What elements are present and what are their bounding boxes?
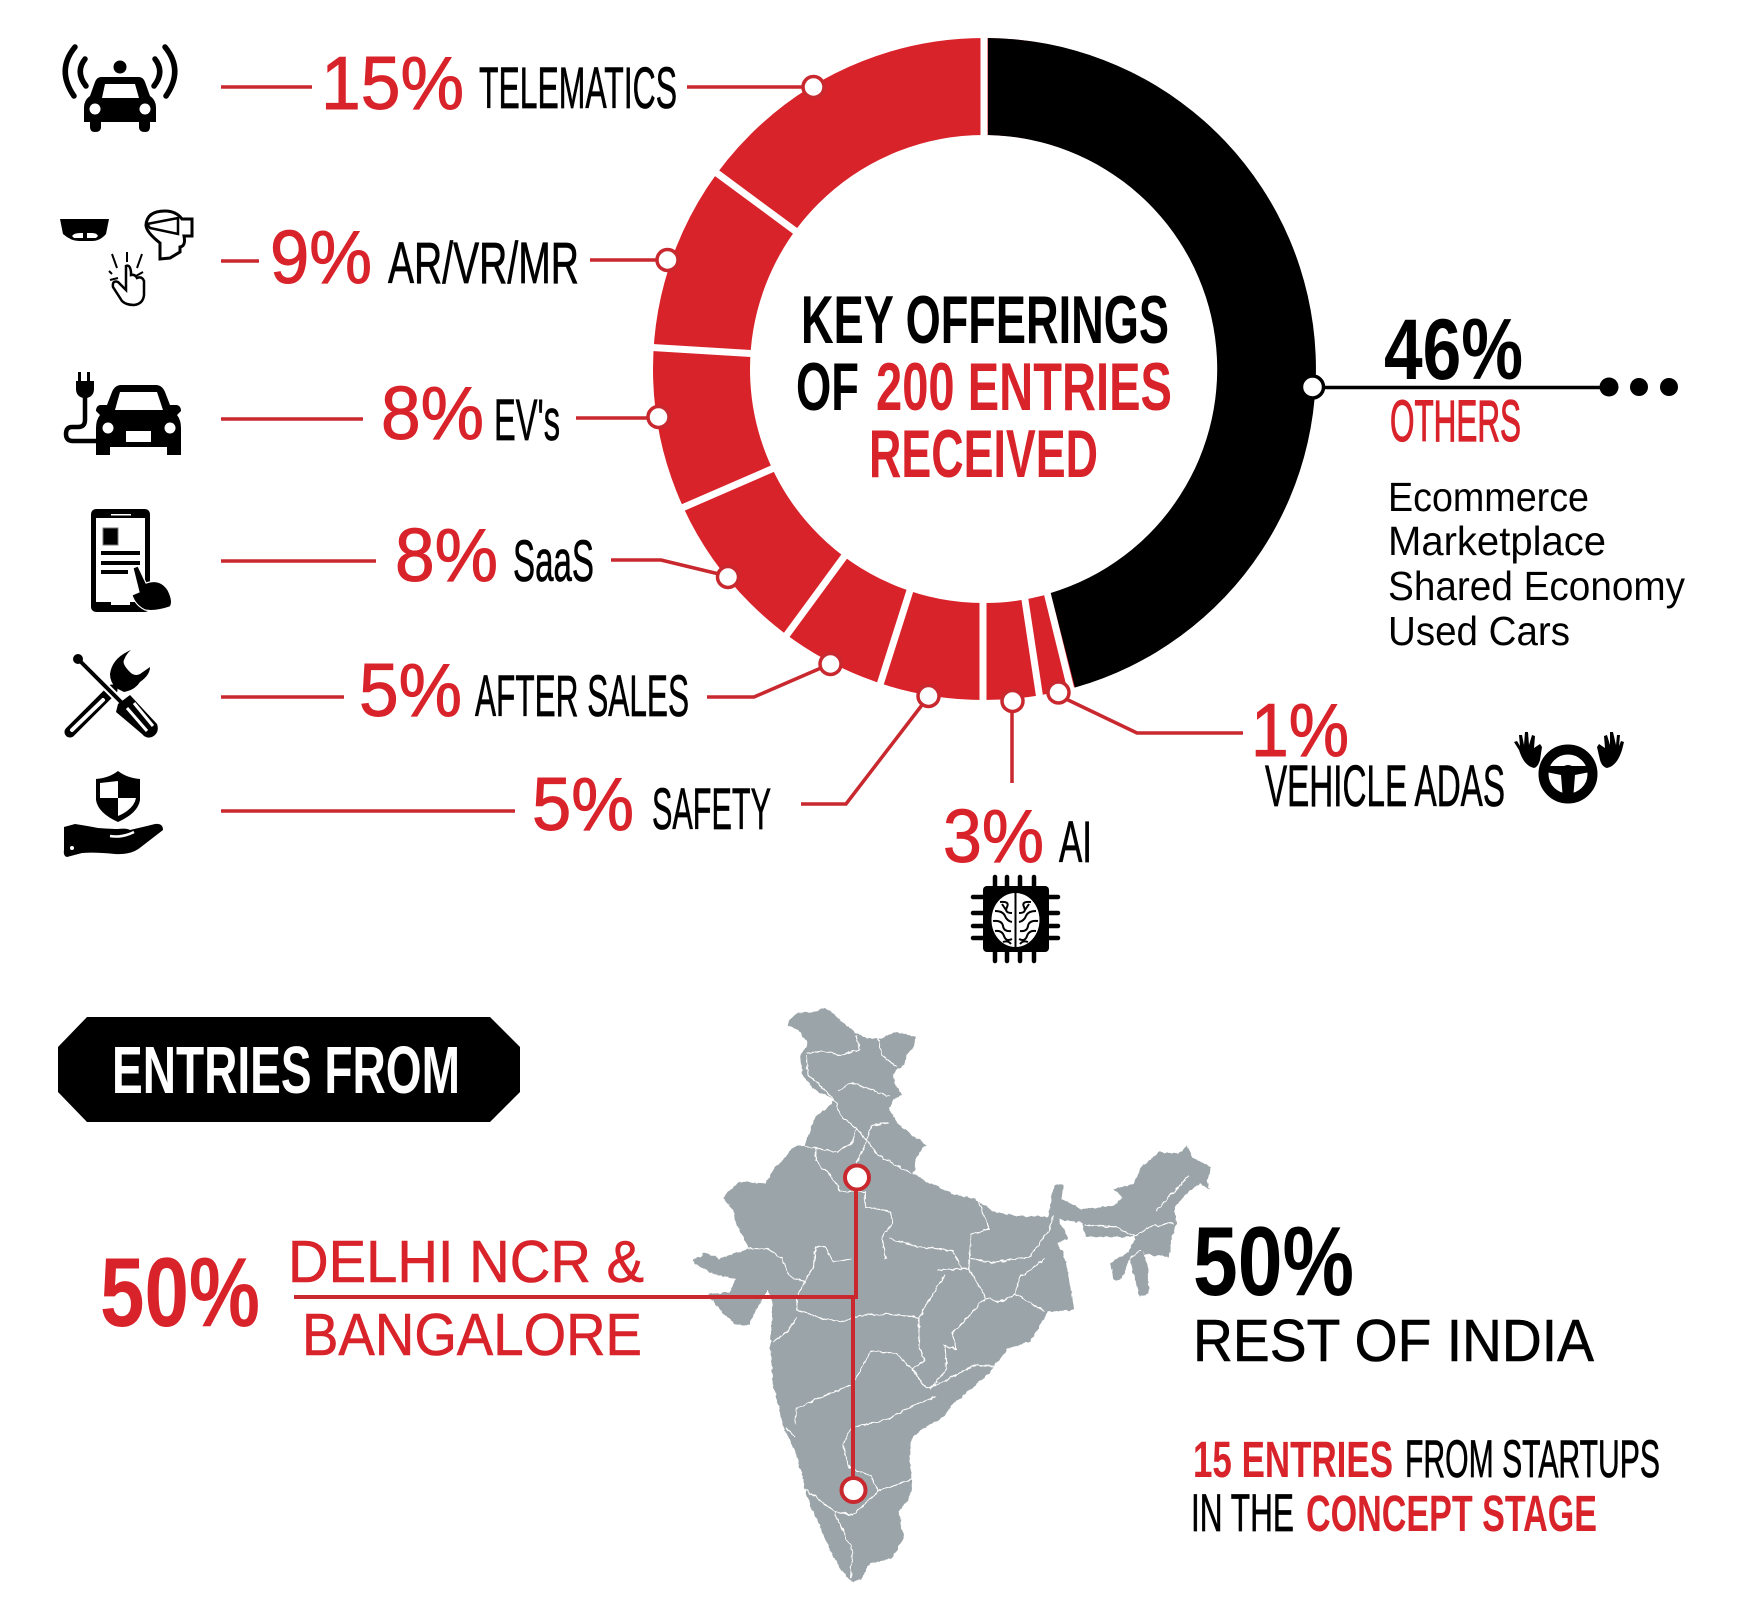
callout: others 46%: 46% [1384, 302, 1523, 398]
heading badge: entries from: ENTRIES FROM [112, 1033, 460, 1108]
row: AR/VR/MR 9%: AR/VR/MR [388, 231, 579, 296]
note: concept stage entries: IN THE [1191, 1484, 1294, 1543]
city connector lines [294, 1177, 856, 1297]
stat: 50% Delhi NCR and Bangalore: BANGALORE [302, 1302, 642, 1368]
note: concept stage entries [1191, 1430, 1660, 1543]
black segment: others 46% [988, 38, 1316, 688]
icon: phone and hand [91, 509, 172, 612]
stat: 50% rest of India: REST OF INDIA [1193, 1308, 1595, 1374]
stat: 50% Delhi NCR and Bangalore [100, 1229, 644, 1368]
list of other offerings [1388, 474, 1685, 654]
row: safety 5%: SAFETY [652, 777, 771, 842]
marker: Delhi [845, 1166, 869, 1190]
row: telematics 15%: 15% [321, 41, 464, 125]
donut chart: key offerings [644, 28, 1316, 710]
title: key offerings of 200 entries received: OF [796, 349, 859, 425]
stat: 50% Delhi NCR and Bangalore: DELHI NCR & [288, 1229, 644, 1295]
row: after sales 5% [70, 648, 841, 738]
callout: others 46% [1302, 302, 1685, 654]
row: AR/VR/MR 9% [60, 211, 678, 305]
row: EV's 8%: 8% [381, 371, 484, 455]
row: vehicle ADAS 1%: 1% [1251, 688, 1349, 772]
row: vehicle ADAS 1%: VEHICLE ADAS [1265, 754, 1505, 819]
list of other offerings: Used Cars [1388, 608, 1570, 654]
row: vehicle ADAS 1% [1048, 682, 1624, 819]
row: safety 5%: 5% [532, 762, 634, 846]
icon: headset and touch [60, 211, 192, 305]
row: AI 3%: AI [1059, 810, 1092, 875]
row: SaaS 8%: 8% [395, 513, 498, 597]
dots [1600, 378, 1678, 396]
icon: electric car [66, 372, 181, 455]
icon: hands off steering wheel [1514, 732, 1624, 800]
title: key offerings of 200 entries received [796, 282, 1172, 492]
row: AI 3% [943, 690, 1092, 961]
row: telematics 15%: TELEMATICS [479, 56, 677, 121]
list of other offerings: Ecommerce [1388, 474, 1589, 520]
heading badge: entries from [58, 1017, 520, 1122]
row: EV's 8%: EV's [494, 388, 560, 453]
title: key offerings of 200 entries received: 200 ENTRIES [876, 349, 1172, 425]
stat: 50% rest of India [1193, 1206, 1595, 1374]
map of India [294, 1008, 1211, 1582]
note: concept stage entries: CONCEPT STAGE [1306, 1485, 1597, 1542]
row: AI 3%: 3% [943, 794, 1044, 878]
marker: Bangalore [842, 1478, 866, 1502]
row: EV's 8% [66, 371, 669, 455]
list of other offerings: Marketplace [1388, 518, 1606, 564]
row: after sales 5%: 5% [359, 648, 462, 732]
stat: 50% rest of India: 50% [1193, 1206, 1354, 1316]
row: after sales 5%: AFTER SALES [475, 664, 689, 729]
row: SaaS 8%: SaaS [513, 529, 594, 594]
row: telematics 15% [65, 41, 824, 132]
icon: connected car [65, 47, 175, 132]
row: safety 5% [64, 686, 939, 857]
title: key offerings of 200 entries received: RECEIVED [869, 416, 1098, 492]
note: concept stage entries: 15 ENTRIES [1193, 1431, 1393, 1488]
row: AR/VR/MR 9%: 9% [270, 215, 372, 299]
title: key offerings of 200 entries received: KEY OFFERINGS [801, 282, 1169, 358]
icon: wrench and screwdriver [70, 650, 158, 738]
callout: others 46%: OTHERS [1390, 389, 1521, 454]
row: SaaS 8% [91, 509, 738, 612]
list of other offerings: Shared Economy [1388, 563, 1685, 609]
icon: brain chip [973, 877, 1058, 961]
stat: 50% Delhi NCR and Bangalore: 50% [100, 1237, 260, 1347]
icon: shield in hand [64, 771, 163, 857]
